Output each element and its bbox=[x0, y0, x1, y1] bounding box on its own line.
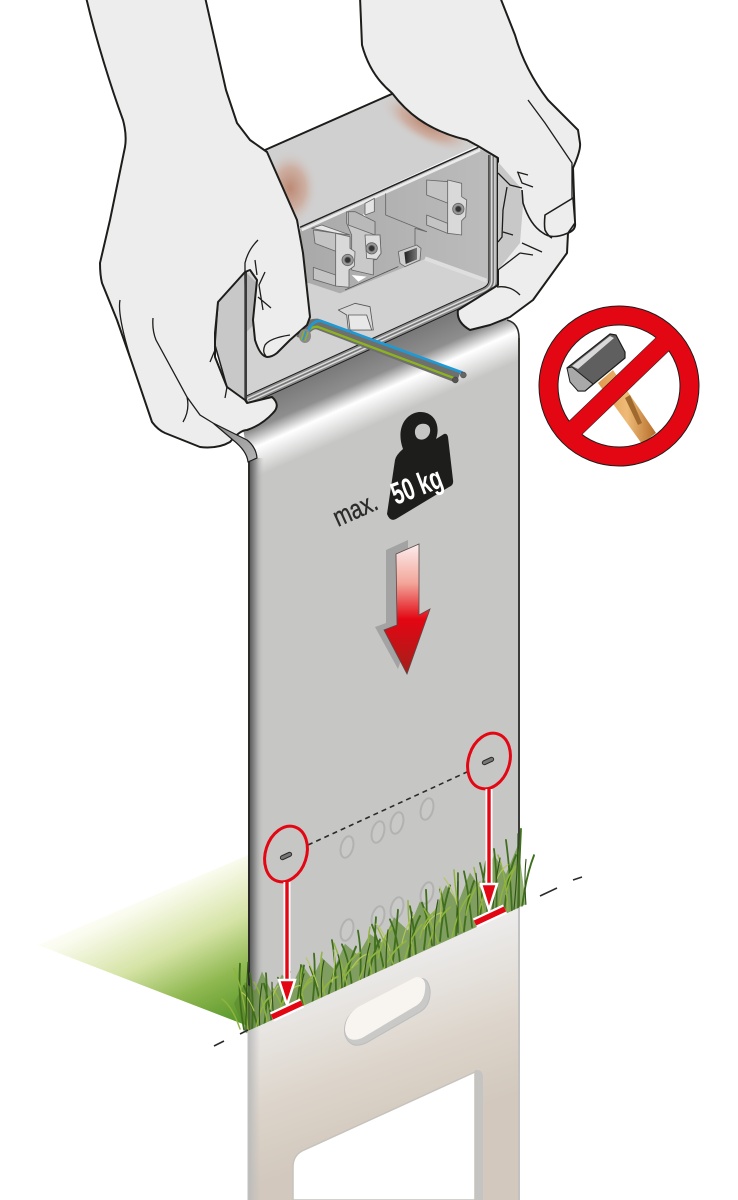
electrical box bbox=[215, 81, 495, 402]
weight icon with 50 kg bbox=[386, 412, 453, 520]
gripped side panel bbox=[498, 162, 523, 270]
green ground wedge bbox=[38, 855, 248, 1026]
right hand fingers bbox=[497, 100, 572, 295]
no-hammer sign bbox=[548, 316, 690, 456]
adjustment slots bbox=[338, 797, 436, 942]
cable end at fingertip bbox=[299, 329, 311, 343]
front clip bbox=[338, 303, 373, 330]
square plug bbox=[398, 245, 421, 267]
hammer handle bbox=[598, 370, 656, 444]
label: max.: max. bbox=[328, 487, 382, 533]
hammer head bbox=[567, 334, 625, 391]
screw post middle bbox=[347, 198, 381, 282]
grass bbox=[222, 783, 534, 1082]
thumb with nail bbox=[522, 190, 575, 238]
marker: right fixing point bbox=[461, 728, 517, 923]
box top panel bbox=[265, 93, 478, 227]
ground dash line bbox=[214, 877, 582, 1046]
box rim bbox=[248, 155, 493, 400]
box back wall bbox=[300, 148, 493, 297]
right hand bbox=[360, 0, 580, 330]
oval slot bbox=[345, 977, 430, 1045]
outer left side of box bbox=[215, 272, 247, 402]
plate lip bbox=[213, 423, 257, 462]
screw post left bbox=[312, 225, 355, 287]
prohibition bar bbox=[568, 337, 670, 435]
plate below ground with slot and window bbox=[240, 903, 530, 1200]
left hand bbox=[86, 0, 311, 447]
prohibition ring bbox=[548, 316, 690, 456]
screw post right bbox=[427, 180, 467, 235]
marker: left fixing point bbox=[258, 821, 314, 1017]
finger creases bbox=[120, 240, 290, 423]
dotted level line bbox=[308, 772, 467, 845]
inner left wall of box bbox=[247, 273, 257, 332]
front edge of top panel bbox=[302, 150, 480, 230]
metal plate above ground bbox=[240, 300, 519, 1032]
box floor bbox=[245, 258, 495, 402]
window opening bbox=[293, 1070, 483, 1200]
weight icon with 50 kg: 50 kg bbox=[386, 460, 447, 512]
arrow: downward load bbox=[375, 540, 430, 674]
cable bbox=[302, 321, 466, 383]
raised back panel bbox=[386, 193, 427, 245]
